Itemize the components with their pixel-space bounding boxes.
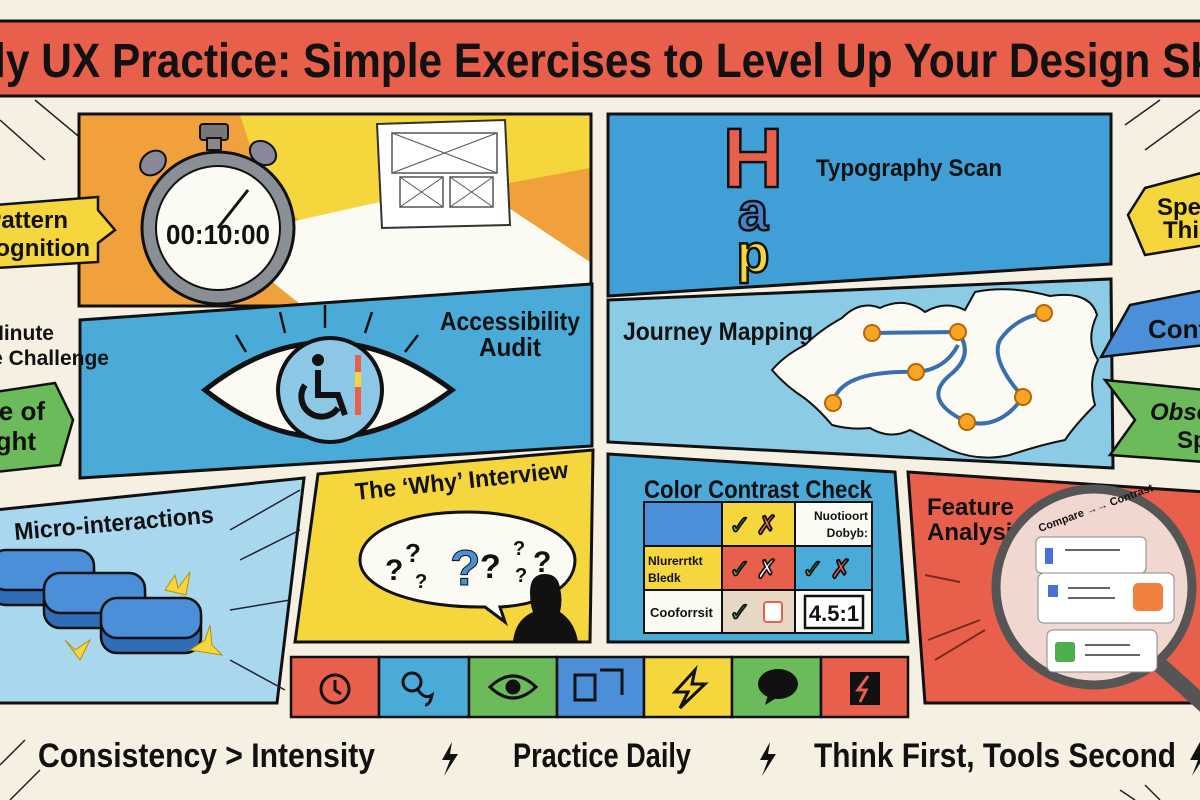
icon: magnifier with cards	[996, 482, 1200, 710]
panel: accessibility audit	[80, 284, 592, 478]
bottom slogans	[38, 737, 1200, 776]
bottom slogans: Practice Daily	[513, 737, 691, 775]
icon: letters H a p: a	[738, 182, 769, 242]
speech bubble: ?	[533, 546, 551, 579]
speech bubble: ?	[415, 571, 427, 593]
panel: color contrast check	[608, 454, 908, 642]
speech bubble: ?	[480, 548, 501, 586]
icon: stopwatch: 00:10:00	[166, 219, 270, 250]
panel: journey mapping: Journey Mapping	[623, 318, 813, 346]
panel: feature analysis: Feature	[927, 494, 1014, 521]
icon: person silhouette	[513, 574, 578, 642]
panel: typography scan	[608, 111, 1111, 296]
bottom slogans: Consistency > Intensity	[38, 737, 375, 775]
left tag: pattern recognition	[0, 197, 115, 268]
panel: color contrast check: ✓	[729, 554, 751, 584]
icon: stopwatch	[135, 124, 294, 304]
icon bar	[291, 657, 908, 717]
panel: micro-interactions: Micro-interactions	[13, 502, 215, 546]
left tag: line of sight	[0, 383, 73, 472]
icon: letters H a p: p	[736, 224, 770, 284]
speech bubble: ?	[385, 554, 403, 587]
icon: wireframe sketch	[377, 120, 510, 228]
icon: lightning	[442, 742, 458, 776]
left text: minute challenge	[0, 322, 109, 370]
icon: buttons	[0, 550, 201, 653]
map with path nodes	[772, 289, 1098, 458]
panel: color contrast check: Cooforrsit	[650, 605, 714, 620]
speech bubble: ?	[513, 538, 525, 560]
panel: accessibility audit: Accessibility	[440, 306, 580, 336]
panel: color contrast check: Nuotioort	[814, 509, 868, 523]
panel: accessibility audit: Audit	[479, 332, 541, 362]
icon: letters H a p: H	[723, 111, 783, 205]
speech bubble: ?	[405, 538, 421, 568]
right tag: observation	[1105, 380, 1200, 462]
panel: color contrast check: ✓	[729, 510, 751, 540]
panel: micro-interactions	[0, 478, 304, 703]
panel: feature analysis: Analysis	[927, 519, 1026, 546]
icon: lightning	[760, 742, 776, 776]
panel: color contrast check: ✗	[756, 554, 778, 584]
panel: color contrast check: 4.5:1	[809, 601, 859, 626]
speech bubble	[360, 512, 575, 622]
panel: journey mapping	[608, 279, 1113, 468]
contrast grid	[644, 502, 872, 633]
right tag: speed	[1128, 172, 1200, 255]
panel: color contrast check: Nlurerrtkt	[648, 554, 703, 568]
panel: color contrast check: ✗	[830, 554, 852, 584]
panel: color contrast check: ✗	[756, 510, 778, 540]
speech bubble: ?	[450, 540, 481, 596]
speech bubble: ?	[515, 565, 527, 587]
icon: letters H a p	[723, 111, 783, 284]
panel: why interview: The ‘Why’ Interview	[354, 457, 570, 506]
panel: color contrast check: Bledk	[648, 571, 681, 585]
panel: why interview	[295, 450, 593, 642]
panel: color contrast check: ✓	[729, 597, 751, 627]
icon: magnifier with cards: Compare →→ Contrast	[1037, 482, 1155, 535]
icon: eye	[205, 305, 452, 442]
right tag: confidence	[1101, 290, 1200, 357]
panel: color contrast check: ✓	[802, 554, 824, 584]
panel: color contrast check: Color Contrast Check	[644, 476, 872, 504]
panel: typography scan: Typography Scan	[816, 155, 1002, 182]
panel: feature analysis	[908, 472, 1200, 710]
panel: timer wireframe	[79, 114, 591, 306]
panel: color contrast check: Dobyb:	[827, 526, 868, 540]
